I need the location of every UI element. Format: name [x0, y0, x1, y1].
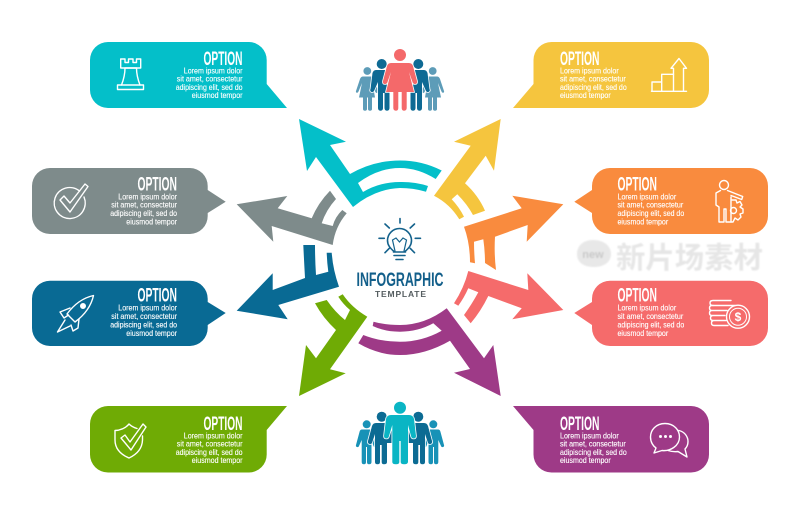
- arrow: teal: [299, 119, 442, 207]
- people group: top: [356, 49, 444, 111]
- panel: salmon option: [574, 281, 768, 346]
- body text: eiusmod tempor: [126, 329, 177, 338]
- figure: left woman: [356, 67, 378, 111]
- icon: shield with check: [115, 424, 146, 458]
- figure: right woman: [422, 67, 444, 111]
- people group: bottom: [356, 402, 444, 464]
- figure: center woman: [383, 49, 417, 111]
- icon: businessman with gear: [716, 180, 743, 222]
- body text: sit amet, consectetur: [618, 312, 683, 321]
- body text: [110, 192, 177, 226]
- panel: green option: [90, 406, 287, 472]
- arrow: purple: [358, 308, 501, 396]
- body text: [560, 432, 627, 465]
- figure: right person: [407, 412, 432, 464]
- body text: eiusmod tempor: [560, 91, 611, 100]
- panel: grey option: [32, 168, 226, 234]
- body text: eiusmod tempor: [192, 456, 243, 465]
- body text: [110, 304, 177, 338]
- body text: Lorem ipsum dolor: [184, 66, 243, 76]
- icon: chat bubbles: [650, 424, 688, 457]
- icon: coins with dollar: [710, 300, 750, 328]
- panel: orange option: [574, 168, 768, 234]
- body text: Lorem ipsum dolor: [560, 432, 619, 440]
- body text: adipiscing elit, sed do: [560, 83, 627, 92]
- watermark: 新片场素材: [616, 242, 763, 275]
- body text: Lorem ipsum dolor: [560, 66, 619, 76]
- figure: left man: [370, 59, 394, 111]
- figure: far right person: [423, 420, 444, 464]
- body text: Lorem ipsum dolor: [184, 432, 243, 440]
- arrow: green: [299, 294, 367, 396]
- body text: eiusmod tempor: [126, 218, 177, 226]
- body text: [560, 66, 627, 100]
- body text: eiusmod tempor: [560, 456, 611, 465]
- body text: adipiscing elit, sed do: [618, 209, 685, 218]
- body text: adipiscing elit, sed do: [110, 209, 177, 218]
- body text: Lorem ipsum dolor: [618, 192, 676, 202]
- body text: Lorem ipsum dolor: [618, 304, 676, 313]
- body text: sit amet, consectetur: [618, 201, 683, 210]
- center title: [356, 218, 444, 299]
- body text: sit amet, consectetur: [111, 201, 177, 210]
- body text: eiusmod tempor: [618, 329, 668, 338]
- icon: light bulb: [379, 218, 420, 260]
- heading: infographic: INFOGRAPHIC: [356, 269, 444, 291]
- body text: adipiscing elit, sed do: [176, 448, 243, 457]
- icon: coins with dollar: $: [735, 310, 742, 324]
- body text: eiusmod tempor: [618, 218, 668, 226]
- icon: rocket: [58, 296, 94, 332]
- body text: [618, 304, 685, 338]
- body text: adipiscing elit, sed do: [110, 320, 177, 330]
- heading: OPTION: [618, 285, 657, 307]
- heading: OPTION: [560, 413, 600, 435]
- arrow: grey: [237, 191, 347, 245]
- body text: [176, 432, 243, 465]
- arrow: yellow: [434, 119, 501, 219]
- figure: left person: [368, 412, 393, 464]
- body text: [618, 192, 685, 226]
- body text: adipiscing elit, sed do: [618, 320, 685, 330]
- arrow: salmon: [454, 271, 563, 323]
- body text: Lorem ipsum dolor: [118, 192, 177, 202]
- icon: check mark in circle: [54, 184, 88, 219]
- icon: chess rook: [118, 59, 144, 90]
- subheading: template: TEMPLATE: [375, 289, 426, 299]
- arrow: orange: [464, 196, 563, 270]
- panel: purple option: [513, 406, 709, 472]
- figure: center person: [384, 402, 416, 464]
- body text: Lorem ipsum dolor: [118, 304, 177, 313]
- panel: yellow option: [513, 42, 709, 108]
- figure: far left person: [356, 420, 377, 464]
- heading: OPTION: [618, 174, 657, 196]
- icon: rising bar chart: [652, 58, 686, 91]
- heading: OPTION: [560, 48, 600, 70]
- body text: sit amet, consectetur: [560, 440, 626, 449]
- body text: sit amet, consectetur: [111, 312, 177, 321]
- body text: adipiscing elit, sed do: [560, 448, 627, 457]
- panel: teal option: [90, 42, 287, 108]
- panel: blue option: [32, 281, 226, 346]
- body text: eiusmod tempor: [192, 91, 243, 100]
- heading: OPTION: [204, 48, 242, 70]
- watermark: new: [582, 249, 604, 261]
- body text: sit amet, consectetur: [177, 440, 243, 449]
- heading: OPTION: [138, 174, 177, 196]
- body text: sit amet, consectetur: [177, 75, 243, 84]
- body text: adipiscing elit, sed do: [176, 83, 243, 92]
- body text: sit amet, consectetur: [560, 75, 626, 84]
- body text: [176, 66, 243, 100]
- heading: OPTION: [204, 413, 242, 435]
- arrow: blue: [237, 245, 339, 319]
- figure: right man: [406, 59, 430, 111]
- heading: OPTION: [138, 285, 177, 307]
